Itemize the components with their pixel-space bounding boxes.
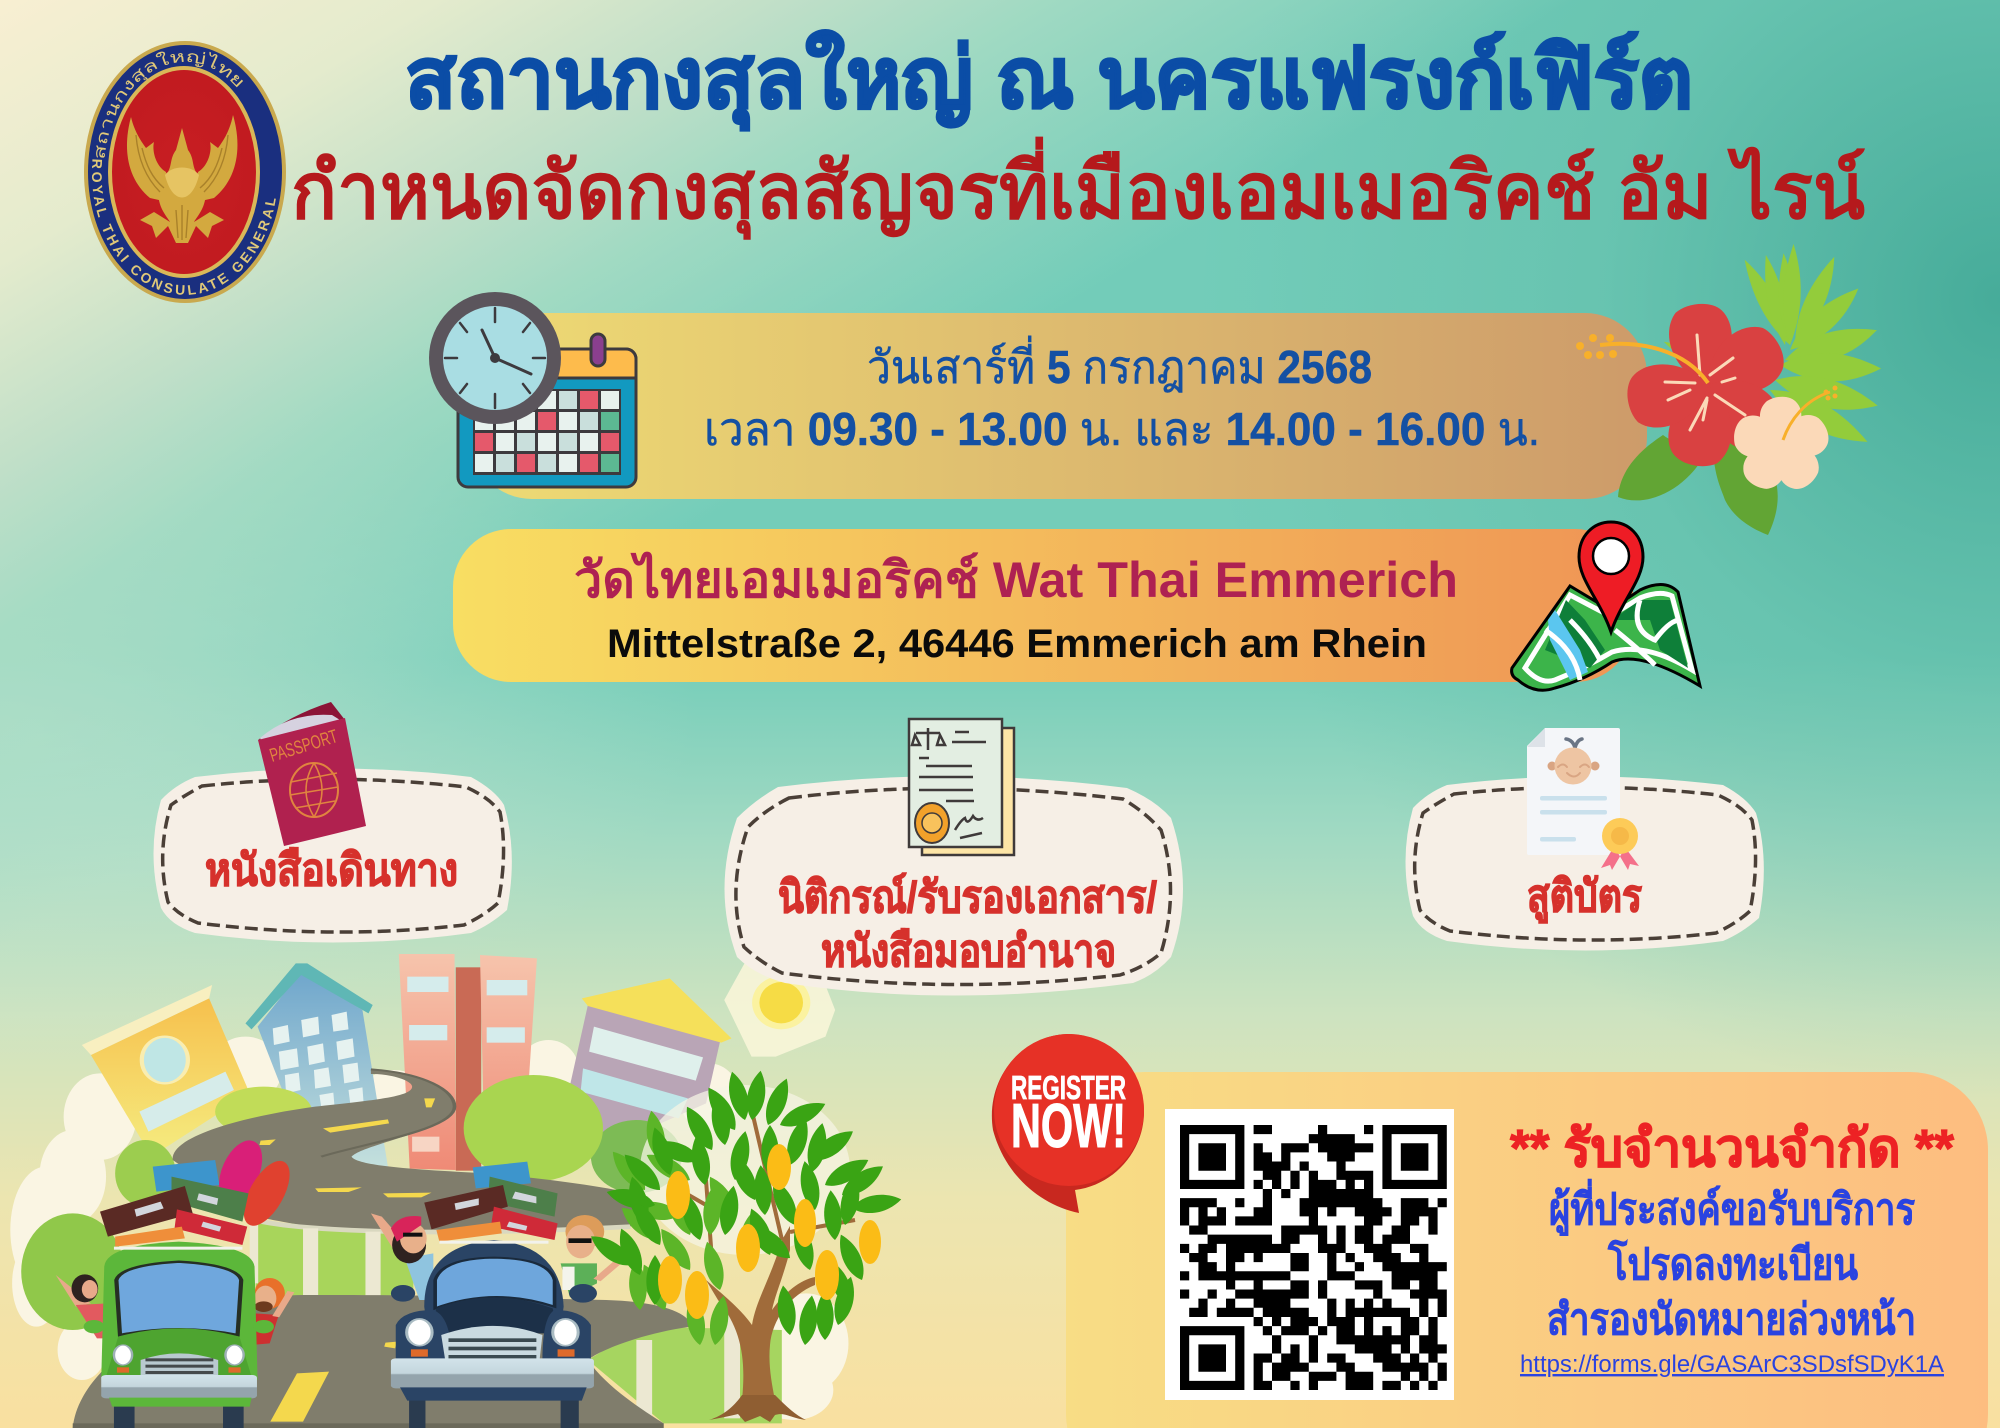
clouds: [10, 1037, 848, 1420]
title: line 1: สถานกงสุลใหญ่ ณ นครแฟรงก์เฟิร์ต: [405, 30, 1693, 131]
luggage on green car: [100, 1139, 299, 1247]
icon: garuda: [127, 115, 237, 243]
text: register: REGISTER: [1011, 1069, 1126, 1106]
emblem: royal thai consulate general seal: ROYAL THAI CONSULATE GENERAL: [92, 159, 276, 295]
building: purple: [570, 978, 732, 1147]
building: pink tower: [399, 954, 537, 1171]
icon: document: [909, 719, 1014, 855]
icon: flowers and leaves: [1576, 244, 1882, 535]
panel: notary service: [724, 719, 1183, 996]
text: time: เวลา 09.30 - 13.00 น. และ 14.00 - 16.00 น.: [704, 403, 1540, 455]
label: notary line 2: หนังสือมอบอำนาจ: [821, 927, 1116, 976]
icon: passport: [258, 702, 366, 846]
icon: clock: [429, 292, 561, 424]
road: upper S-curve: [173, 1069, 648, 1233]
text: now: NOW!: [1011, 1092, 1126, 1161]
text: registration link: https://forms.gle/GASArC3SDsfSDyK1A: [1520, 1351, 1944, 1378]
person: woman left of green car: [56, 1274, 108, 1338]
text: registration line 1: ผู้ที่ประสงค์ขอรับบริการ: [1549, 1179, 1915, 1236]
bushes: [21, 1075, 782, 1423]
icon: sun: [724, 962, 835, 1057]
panel: birth certificate service: [1406, 728, 1764, 950]
title: line 2: กำหนดจัดกงสุลสัญจรที่เมืองเอมเมอริคช์ อัม ไรน์: [291, 136, 1866, 240]
luggage on navy car: [424, 1162, 558, 1242]
emblem: royal thai consulate general seal: [84, 41, 286, 303]
text: registration line 3: สำรองนัดหมายล่วงหน้า: [1547, 1296, 1916, 1344]
label: passport: หนังสือเดินทาง: [205, 846, 458, 895]
pillars: [250, 1223, 740, 1418]
panel: passport service: [154, 702, 512, 942]
text: date: วันเสาร์ที่ 5 กรกฎาคม 2568: [867, 335, 1372, 393]
person: woman left of navy car: [371, 1213, 433, 1300]
badge: register now: [992, 1034, 1144, 1213]
panel: registration: [1066, 1072, 1988, 1428]
icon: map and pin: [1512, 522, 1700, 690]
label: birth certificate: สูติบัตร: [1527, 872, 1642, 923]
road: lower section: [73, 1295, 691, 1428]
person: man right of green car: [252, 1278, 291, 1345]
illustration: city, road, cars and sun: [10, 954, 903, 1428]
icon: navy car: [391, 1240, 597, 1428]
QR code: [1165, 1109, 1454, 1400]
icon: calendar: [458, 334, 636, 487]
icon: birth certificate: [1527, 728, 1639, 870]
icon: passport: PASSPORT: [267, 726, 341, 767]
emblem: royal thai consulate general seal: สถานกงสุลใหญ่ไทย: [96, 52, 243, 158]
road dashes: [259, 1098, 435, 1197]
label: notary line 1: นิติกรณ์/รับรองเอกสาร/: [778, 872, 1157, 922]
panel: venue: [453, 529, 1633, 682]
text: registration line 2: โปรดลงทะเบียน: [1607, 1238, 1859, 1289]
text: venue name: วัดไทยเอมเมอริคช์ Wat Thai Emmerich: [574, 551, 1458, 608]
text: limited seats: ** รับจำนวนจำกัด **: [1510, 1120, 1955, 1178]
text: venue address: Mittelstraße 2, 46446 Emmerich am Rhein: [607, 622, 1427, 666]
person: man right of navy car: [561, 1215, 624, 1297]
icon: green car: [84, 1242, 274, 1428]
panel: date and time: [470, 313, 1647, 499]
icon: mango tree: [586, 1069, 903, 1422]
building: blue: [245, 963, 388, 1167]
building: yellow: [82, 985, 250, 1157]
